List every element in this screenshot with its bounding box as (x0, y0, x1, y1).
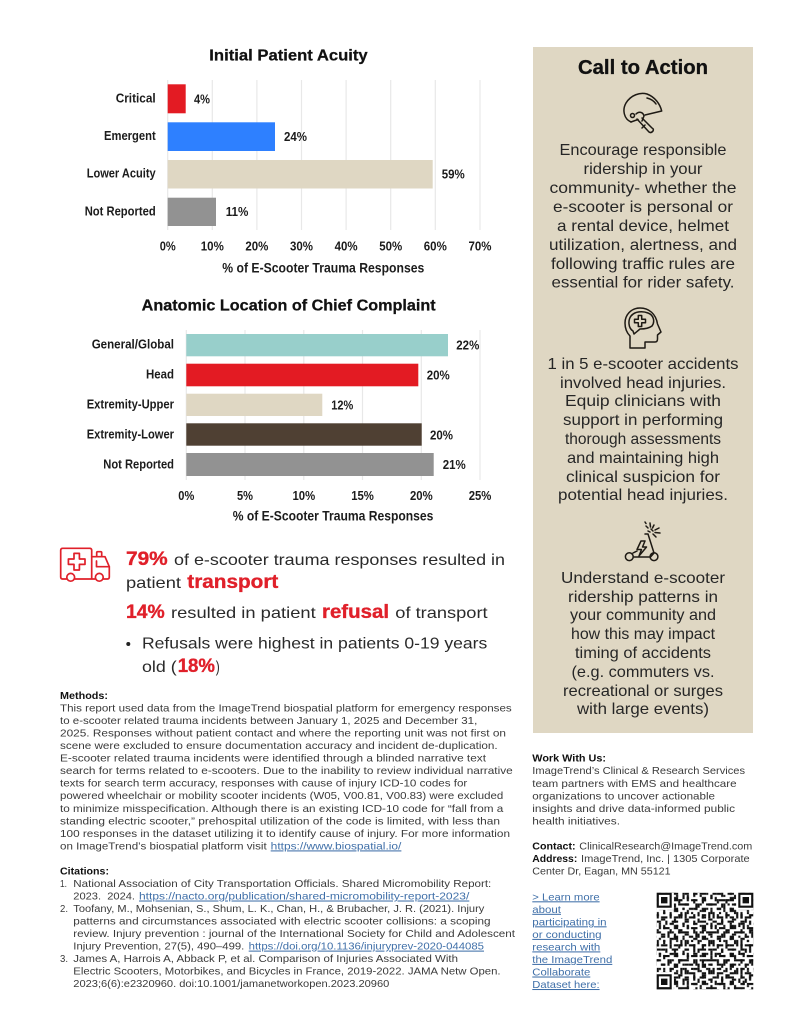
category labels: Critical (116, 91, 156, 106)
text: head injuries: potential head injuries. (558, 487, 728, 504)
x axis ticks: 15% (351, 488, 374, 503)
link: learn more: the ImageTrend (532, 955, 613, 966)
text block: methods: 2025. Responses without patient contact and where the reporting unit was not first on (60, 729, 506, 740)
value labels: 21% (443, 457, 466, 472)
x axis ticks: 0% (160, 239, 176, 254)
text: encourage responsible ridership: a rental device, helmet (557, 218, 730, 235)
icon: scooter crash (625, 522, 660, 561)
value labels (194, 91, 465, 219)
x axis ticks: 5% (237, 488, 253, 503)
text block: contact (532, 841, 752, 878)
text: ridership patterns: timing of accidents (575, 645, 711, 662)
text block: citations: https://nacto.org/publication/shared-micromobility-report-2023/ (139, 892, 469, 902)
link: learn more: Collaborate (532, 968, 591, 978)
link: learn more: or conducting (532, 930, 602, 941)
bullet: refusals by age: Refusals were highest in patients 0-19 years (142, 635, 488, 652)
text block: contact: ImageTrend, Inc. | 1305 Corporate (581, 854, 750, 865)
text: ridership patterns: your community and (570, 607, 716, 624)
text: ridership patterns: Understand e-scooter (561, 570, 725, 587)
text: ridership patterns: recreational or surges (563, 683, 723, 700)
text: encourage responsible ridership: following traffic rules are (551, 256, 735, 273)
bars (168, 84, 433, 226)
text block: methods: on ImageTrend’s biospatial platform visit (60, 841, 267, 852)
category labels: Extremity-Upper (87, 397, 174, 412)
text block: work with us: ImageTrend’s Clinical & Research Services (532, 766, 745, 777)
text block: methods: E-scooter related trauma incidents were identified through a blinded narrative text (60, 754, 486, 765)
stat: 79% transport: of e-scooter trauma responses resulted in (174, 552, 505, 569)
text block: methods: This report used data from the ImageTrend biospatial platform for emergency responses (60, 704, 512, 714)
text block: citations: Toofany, M., Mohsenian, S., Shum, L. K., Chan, H., & Brubacher, J. R. (2021). Injury (73, 904, 485, 915)
text block: methods: scene were excluded to ensure documentation accuracy and incident de-duplication. (60, 741, 498, 752)
value labels: 20% (430, 427, 453, 442)
x axis title: % of E-Scooter Trauma Responses (222, 260, 424, 276)
category labels: Extremity-Lower (87, 427, 174, 442)
x axis ticks: 20% (410, 488, 433, 503)
stat: 14% refusal: of transport (395, 605, 488, 622)
x axis ticks: 25% (469, 488, 492, 503)
text: encourage responsible ridership: essential for rider safety. (552, 274, 734, 292)
x axis ticks: 0% (178, 488, 195, 503)
bars (186, 334, 448, 476)
x axis ticks (178, 488, 492, 503)
text block: methods (60, 691, 513, 852)
stat: 14% refusal: 14% (126, 602, 165, 623)
link: learn more: research with (532, 942, 601, 953)
heading: Initial Patient Acuity: Initial Patient Acuity (209, 48, 368, 65)
text: head injuries: 1 in 5 e-scooter accidents (548, 356, 739, 373)
x axis ticks: 10% (201, 239, 224, 254)
category labels (87, 337, 174, 471)
link: learn more: about (532, 905, 561, 916)
link: learn more: Dataset here: (532, 980, 600, 991)
text block: citations: National Association of City Transportation Officials. Shared Micromobility Report: (73, 879, 491, 890)
bullet: refusals by age: ) (216, 659, 220, 676)
text block: citations: 2023;6(6):e2320960. doi:10.1001/jamanetworkopen.2023.20960 (73, 979, 390, 990)
text block: citations: 1. (60, 879, 67, 890)
text block: citations: 3. (60, 954, 68, 965)
x axis title: % of E-Scooter Trauma Responses (233, 508, 434, 524)
text: head injuries: and maintaining high (567, 450, 719, 467)
text block: work with us: organizations to uncover actionable (532, 791, 715, 802)
value labels: 24% (284, 129, 307, 144)
link: learn more (532, 892, 613, 991)
text: ridership patterns (561, 570, 725, 718)
text block: methods: Methods: (60, 691, 108, 702)
text block: citations: James A, Harrois A, Abback P, et al. Comparison of Injuries Associated With (73, 954, 458, 965)
text block: work with us: team partners with EMS and healthcare (532, 779, 737, 790)
stat: 14% refusal: refusal (322, 602, 389, 623)
text: head injuries (548, 356, 739, 504)
text block: contact: Address: (532, 854, 577, 865)
text: encourage responsible ridership: community- whether the (550, 180, 736, 197)
text: encourage responsible ridership: Encourage responsible (560, 142, 726, 159)
x axis ticks (160, 239, 492, 254)
text: ridership patterns: (e.g. commuters vs. (572, 664, 714, 681)
text: ridership patterns: with large events) (576, 701, 709, 718)
link: learn more: participating in (532, 917, 607, 928)
text block: citations: 2. (60, 904, 68, 915)
heading: call to action: Call to Action (578, 57, 708, 79)
text block: work with us (532, 754, 745, 827)
panel: call to action (533, 47, 753, 733)
category labels (85, 91, 156, 218)
text block: work with us: Work With Us: (532, 754, 606, 765)
stat: 79% transport: patient (126, 575, 182, 592)
value labels: 59% (442, 166, 465, 181)
text block: citations: Electric Scooters, Motorbikes, and Bicycles in France, 2019-2022. JAMA Netw Open. (73, 967, 501, 978)
x axis ticks: 50% (379, 239, 403, 254)
text block: citations: review. Injury prevention : journal of the International Society for Child and Adolescent (73, 929, 515, 940)
bullet: refusals by age: old ( (142, 659, 178, 676)
text block: methods: 100 responses in the dataset utilizing it to identify cause of injury. For more information (60, 829, 510, 840)
text: head injuries: involved head injuries. (560, 375, 726, 392)
text: ridership patterns: how this may impact (571, 626, 716, 643)
text block: methods: powered wheelchair or mobility scooter incidents (W05, V00.81, V00.83) were excluded (60, 791, 504, 802)
text block: methods: standing electric scooter,” prehospital utilization of the code is limited, with less than (60, 816, 500, 827)
text block: citations (60, 866, 515, 990)
x axis ticks: 20% (245, 239, 269, 254)
link: learn more: > Learn more (532, 892, 600, 903)
bullet: refusals by age (126, 635, 488, 677)
stat: 79% transport (126, 549, 505, 593)
text: encourage responsible ridership: e-scooter is personal or (553, 199, 733, 216)
category labels: General/Global (92, 337, 174, 352)
text block: work with us: insights and drive data-informed public (532, 804, 735, 815)
category labels: Lower Acuity (87, 166, 156, 181)
text block: citations: patterns and circumstances associated with electric scooter collisions: a scoping (73, 916, 491, 928)
category labels: Emergent (104, 128, 156, 143)
text block: methods: search for terms related to e-scooters. Due to the inability to review individual narrative (60, 766, 513, 777)
text block: contact: ClinicalResearch@ImageTrend.com (579, 841, 752, 852)
text block: contact: Contact: (532, 841, 576, 852)
category labels: Not Reported (103, 456, 174, 471)
chart: Initial Patient Acuity (85, 48, 492, 276)
value labels: 11% (226, 204, 249, 219)
stat: 14% refusal (126, 602, 488, 623)
x axis ticks: 60% (424, 239, 447, 254)
QR code (657, 893, 753, 989)
text block: citations: Injury Prevention, 27(5), 490–499. (73, 942, 244, 953)
x axis ticks: 40% (335, 239, 358, 254)
bullet: refusals by age: 18% (178, 656, 215, 677)
x axis ticks: 10% (292, 488, 316, 503)
text: head injuries: clinical suspicion for (566, 469, 720, 486)
value labels: 12% (331, 397, 354, 412)
text: ridership patterns: ridership patterns in (568, 589, 718, 606)
icon: head with medical cross (625, 308, 661, 348)
text block: citations: Citations: (60, 866, 109, 877)
category labels: Not Reported (85, 203, 156, 218)
value labels (331, 337, 480, 472)
icon: helmet (624, 93, 662, 133)
text block: methods: https://www.biospatial.io/ (271, 841, 402, 852)
text: head injuries: thorough assessments (565, 431, 721, 448)
icon: ambulance (61, 548, 109, 581)
text: head injuries: Equip clinicians with (565, 393, 721, 410)
x axis ticks: 70% (468, 239, 492, 254)
text: head injuries: support in performing (563, 412, 723, 429)
text block: methods: to minimize misspecification. Although there is an existing ICD-10 code for “fall from a (60, 804, 504, 815)
stat: 79% transport: 79% (126, 549, 168, 570)
text: encourage responsible ridership (549, 142, 737, 292)
text block: methods: texts for search term accuracy, responses with cause of injury ICD-10 codes for (60, 779, 468, 790)
text block: contact: Center Dr, Eagan, MN 55121 (532, 866, 671, 878)
chart: Anatomic Location of Chief Complaint (87, 298, 492, 524)
heading: Anatomic Location: Anatomic Location of Chief Complaint (142, 298, 436, 315)
x axis ticks: 30% (290, 239, 313, 254)
value labels: 22% (456, 337, 480, 352)
stat: 14% refusal: resulted in patient (171, 605, 316, 622)
stats: transport and refusal (126, 549, 505, 677)
value labels: 20% (427, 367, 450, 382)
text: encourage responsible ridership: utilization, alertness, and (549, 237, 737, 254)
text block: citations: 2023. 2024. (73, 892, 135, 902)
text block: methods: to e-scooter related trauma incidents between January 1, 2025 and December 31, (60, 716, 477, 727)
text block: work with us: health initiatives. (532, 816, 620, 827)
value labels: 4% (194, 91, 210, 106)
text: encourage responsible ridership: ridership in your (584, 161, 702, 178)
category labels: Head (146, 367, 174, 382)
stat: 79% transport: transport (187, 572, 279, 593)
text block: citations: https://doi.org/10.1136/injuryprev-2020-044085 (249, 942, 484, 953)
